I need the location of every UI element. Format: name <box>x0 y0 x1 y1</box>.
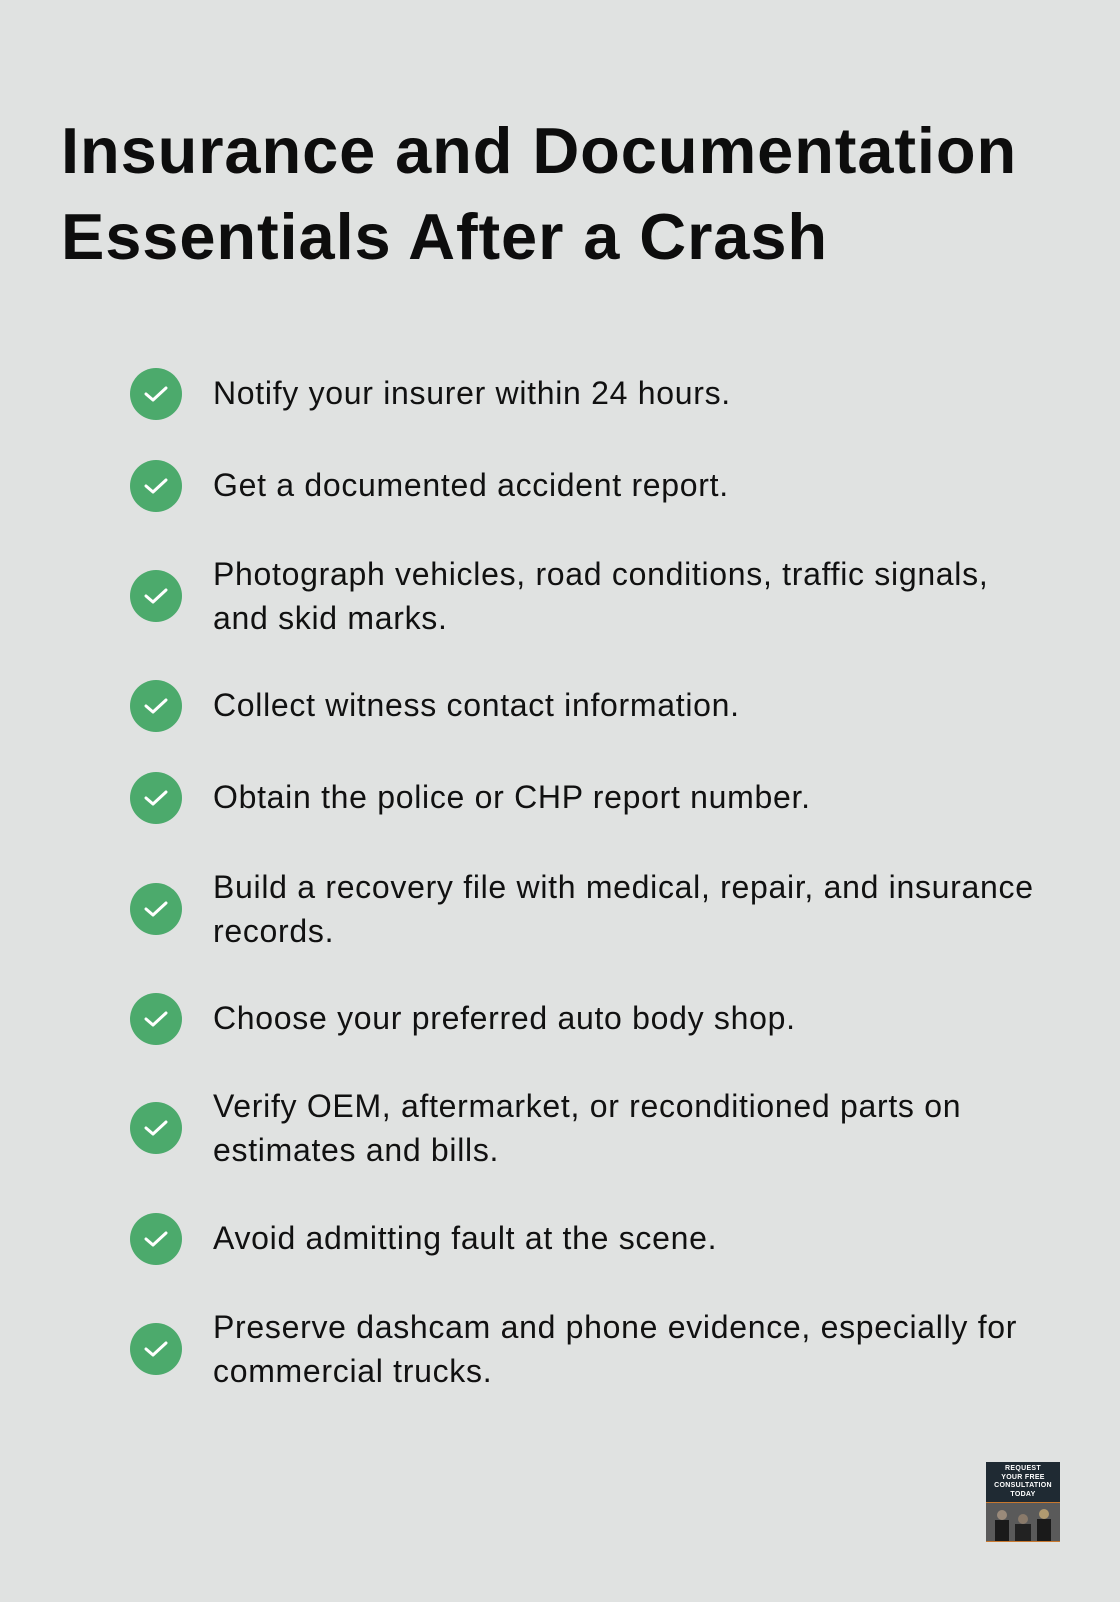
title: Essentials After a Crash <box>61 200 828 273</box>
item 2 <box>130 460 729 512</box>
item 8 <box>130 1088 961 1168</box>
item 10: commercial trucks. <box>213 1353 492 1389</box>
item 10 <box>130 1309 1017 1389</box>
logo: consultation badge: REQUEST <box>1005 1465 1041 1472</box>
item 5 <box>130 772 811 824</box>
item 7: Choose your preferred auto body shop. <box>213 1000 796 1036</box>
logo: consultation badge: TODAY <box>1010 1490 1036 1498</box>
item 6: records. <box>213 913 334 949</box>
item 9 <box>130 1213 717 1265</box>
item 6: Build a recovery file with medical, repair, and insurance <box>213 869 1034 905</box>
item 2: Get a documented accident report. <box>213 467 729 503</box>
item 1 <box>130 368 731 420</box>
item 4: Collect witness contact information. <box>213 687 740 723</box>
item 3: Photograph vehicles, road conditions, traffic signals, <box>213 556 988 592</box>
title: Insurance and Documentation <box>61 114 1017 187</box>
item 6 <box>130 869 1034 949</box>
item 8: estimates and bills. <box>213 1132 499 1168</box>
item 7 <box>130 993 796 1045</box>
item 8: Verify OEM, aftermarket, or reconditioned parts on <box>213 1088 961 1124</box>
item 3: and skid marks. <box>213 600 448 636</box>
logo: consultation badge: YOUR FREE <box>1001 1474 1045 1480</box>
checklist <box>130 368 1034 1389</box>
item 4 <box>130 680 740 732</box>
item 10: Preserve dashcam and phone evidence, especially for <box>213 1309 1017 1345</box>
item 3 <box>130 556 988 636</box>
item 5: Obtain the police or CHP report number. <box>213 779 811 815</box>
logo: consultation badge <box>986 1462 1060 1542</box>
logo: consultation badge: CONSULTATION <box>994 1482 1052 1489</box>
item 9: Avoid admitting fault at the scene. <box>213 1220 717 1256</box>
title <box>61 114 1017 273</box>
item 1: Notify your insurer within 24 hours. <box>213 375 731 411</box>
